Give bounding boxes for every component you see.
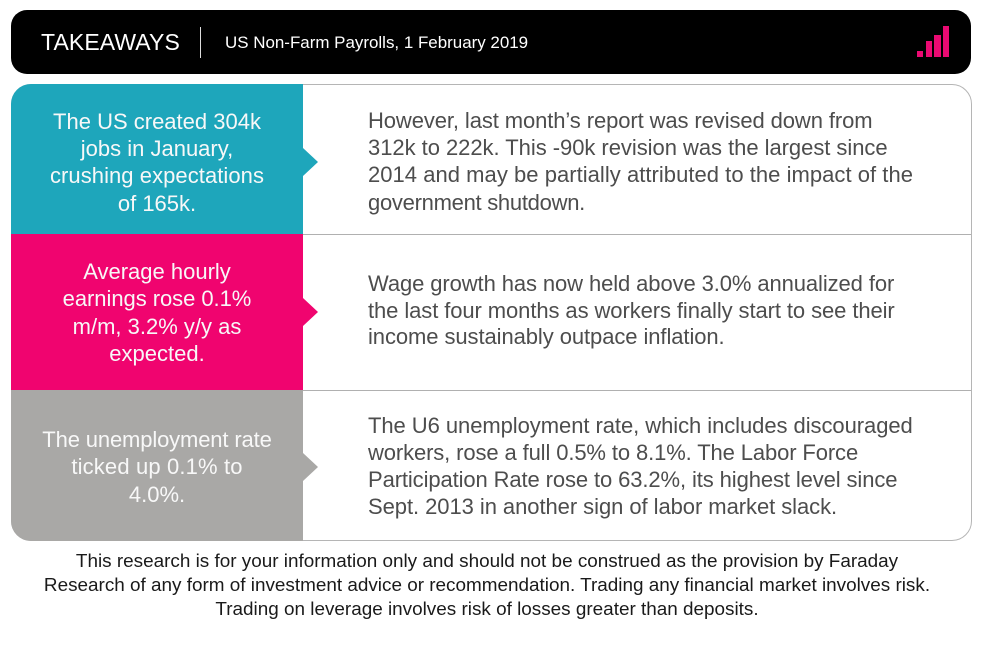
panel: grey headline xyxy=(11,390,303,541)
text: government shutdown. xyxy=(368,190,585,215)
text: m/m, 3.2% y/y as xyxy=(73,314,241,339)
text: 312k to 222k. This -90k revision was the largest since xyxy=(368,135,888,160)
text: ticked up 0.1% to xyxy=(71,454,243,479)
text: 2014 and may be partially attributed to the impact of the xyxy=(368,162,913,187)
header title: TAKEAWAYS xyxy=(41,29,180,55)
text: Average hourly xyxy=(83,259,231,284)
arrow: grey xyxy=(303,453,318,481)
header divider xyxy=(200,27,201,58)
text: The unemployment rate xyxy=(42,427,272,452)
text: workers, rose a full 0.5% to 8.1%. The Labor Force xyxy=(368,440,858,465)
grey body text xyxy=(368,413,913,519)
text: earnings rose 0.1% xyxy=(63,286,251,311)
text: Wage growth has now held above 3.0% annualized for xyxy=(368,271,894,296)
teal body text xyxy=(368,108,913,215)
text: of 165k. xyxy=(118,191,196,216)
text: 4.0%. xyxy=(129,482,185,507)
row divider xyxy=(303,234,971,235)
panel: teal headline xyxy=(11,84,303,234)
text: This research is for your information only and should not be construed as the provision by Faraday xyxy=(76,551,898,572)
arrow: teal xyxy=(303,148,318,176)
pink headline text xyxy=(63,259,251,366)
pink body text xyxy=(368,271,895,349)
text: the last four months as workers finally start to see their xyxy=(368,298,895,323)
text: Trading on leverage involves risk of losses greater than deposits. xyxy=(215,599,759,620)
main panel xyxy=(11,84,972,541)
teal headline text xyxy=(50,109,264,216)
grey headline text xyxy=(42,427,272,507)
text: expected. xyxy=(109,341,205,366)
text: Participation Rate rose to 63.2%, its highest level since xyxy=(368,467,897,492)
header bar xyxy=(11,10,971,74)
text: However, last month’s report was revised down from xyxy=(368,108,872,133)
icon: signal bars xyxy=(917,26,949,57)
text: Sept. 2013 in another sign of labor market slack. xyxy=(368,494,837,519)
text: The U6 unemployment rate, which includes discouraged xyxy=(368,413,913,438)
text: crushing expectations xyxy=(50,163,264,188)
text: income sustainably outpace inflation. xyxy=(368,324,725,349)
text: The US created 304k xyxy=(53,109,261,134)
panel: pink headline xyxy=(11,234,303,390)
header subtitle: US Non-Farm Payrolls, 1 February 2019 xyxy=(225,33,528,52)
disclaimer xyxy=(44,551,930,620)
text: jobs in January, xyxy=(81,136,233,161)
row divider xyxy=(303,390,971,391)
text: Research of any form of investment advice or recommendation. Trading any financial market involves risk. xyxy=(44,575,930,596)
arrow: pink xyxy=(303,298,318,326)
